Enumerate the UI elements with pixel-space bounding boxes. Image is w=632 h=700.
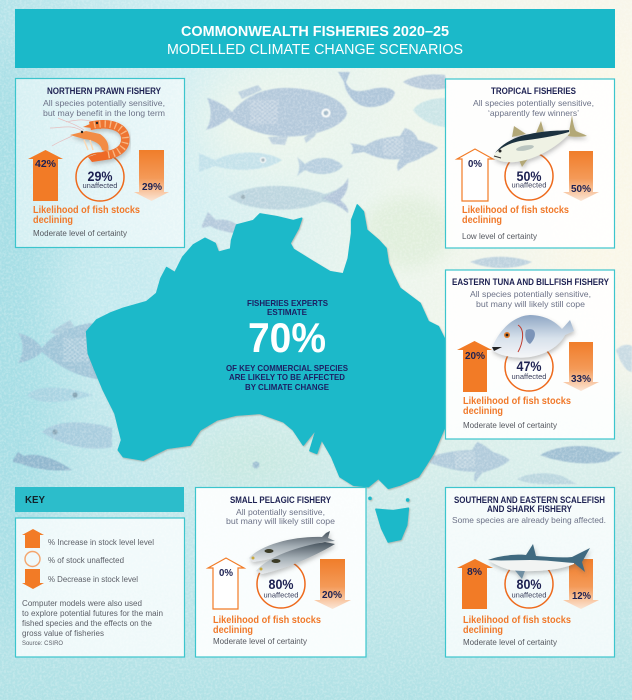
panel: Small Pelagic Fishery <box>196 488 366 657</box>
panel: Eastern Tuna and Billfish Fishery: Moderate level of certainty <box>463 421 557 430</box>
up arrow 0% <box>208 558 244 609</box>
panel: Key: % Increase in stock level level <box>48 538 154 547</box>
background fish: east coast snapper <box>430 442 510 482</box>
panel: Eastern Tuna and Billfish Fishery <box>446 270 614 439</box>
panel: Eastern Tuna and Billfish Fishery: Likelihood of fish stocks <box>463 395 571 407</box>
up arrow 0% <box>457 149 493 201</box>
panel: Northern Prawn Fishery: but may benefit in the long term <box>43 108 165 118</box>
down arrow 20% <box>314 559 351 609</box>
background fish: north east strip <box>470 257 532 268</box>
panel: Southern and Eastern Scalefish and Shark Fishery: 12% <box>572 591 591 602</box>
panel: Northern Prawn Fishery: unaffected <box>82 181 118 190</box>
panel: Eastern Tuna and Billfish Fishery: 20% <box>465 351 485 362</box>
background fish: west coast <box>18 320 105 380</box>
unaffected circle <box>505 560 553 608</box>
panel: Small Pelagic Fishery: declining <box>213 624 253 636</box>
icon: prawn <box>50 118 125 162</box>
panel: Southern and Eastern Scalefish and Shark Fishery: AND SHARK FISHERY <box>487 504 572 514</box>
icon: decrease arrow <box>22 569 44 589</box>
map text: experts estimate: FISHERIES EXPERTS <box>247 298 328 308</box>
panel: Eastern Tuna and Billfish Fishery: 33% <box>571 374 591 385</box>
panel: Small Pelagic Fishery: unaffected <box>264 590 298 600</box>
background fish: large bream <box>206 85 347 145</box>
panel: Key: % Decrease in stock level <box>48 575 138 584</box>
panel: Southern and Eastern Scalefish and Shark Fishery: SOUTHERN AND EASTERN SCALEFISH <box>454 495 605 505</box>
panel: Key heading <box>15 487 184 512</box>
panel: Tropical Fisheries: All species potentially sensitive, <box>473 98 594 108</box>
title line 1: COMMONWEALTH FISHERIES 2020–25 <box>181 24 449 40</box>
panel: Key: % of stock unaffected <box>48 556 124 565</box>
panel: Small Pelagic Fishery: Moderate level of certainty <box>213 637 307 646</box>
panel: Key: to explore potential futures for the main <box>22 609 163 618</box>
background fish: pale west <box>27 387 93 402</box>
background fish: scattered <box>517 473 577 484</box>
panel: Eastern Tuna and Billfish Fishery: All species potentially sensitive, <box>470 289 591 299</box>
background fish: snapper <box>350 128 438 171</box>
panel: Small Pelagic Fishery: but many will likely still cope <box>226 516 335 526</box>
icon: sardines <box>249 531 335 574</box>
panel: Southern and Eastern Scalefish and Shark Fishery: Likelihood of fish stocks <box>463 614 571 626</box>
panel: Key: Source: CSIRO <box>22 640 63 647</box>
panel: Northern Prawn Fishery: declining <box>33 214 73 226</box>
panel: Tropical Fisheries: Low level of certainty <box>462 232 537 241</box>
icon: unaffected circle <box>25 552 40 566</box>
panel: Northern Prawn Fishery: All species potentially sensitive, <box>43 98 165 108</box>
down arrow 12% <box>563 559 599 609</box>
panel: Tropical Fisheries <box>446 79 614 248</box>
panel: Small Pelagic Fishery: Likelihood of fish stocks <box>213 614 321 626</box>
panel: Tropical Fisheries: Likelihood of fish stocks <box>462 204 569 216</box>
background fish: tailed <box>228 178 348 213</box>
panel: Southern and Eastern Scalefish and Shark Fishery: 80% <box>516 577 542 592</box>
panel: Southern and Eastern Scalefish and Shark Fishery: Some species are already being affected. <box>452 515 606 525</box>
background fish: right edge <box>616 345 632 372</box>
panel: Key: Computer models were also used <box>22 599 142 608</box>
background fish: small upper right <box>403 74 448 90</box>
panel: Northern Prawn Fishery: NORTHERN PRAWN FISHERY <box>47 86 161 96</box>
up arrow 20% <box>457 341 492 392</box>
panel: Northern Prawn Fishery: Likelihood of fish stocks <box>33 204 140 216</box>
icon: bream fish <box>492 315 574 358</box>
panel: Eastern Tuna and Billfish Fishery: but many will likely still cope <box>476 299 585 309</box>
panel: Key heading: KEY <box>25 495 45 506</box>
panel: Tropical Fisheries: declining <box>462 214 502 226</box>
map text: commercial species <box>226 363 348 392</box>
panel: Key <box>16 518 184 657</box>
map text: experts estimate: ESTIMATE <box>267 307 307 317</box>
big number: 70%: 70% <box>248 314 326 361</box>
icon: tuna <box>493 115 587 167</box>
unaffected circle <box>257 560 305 608</box>
icon: increase arrow <box>22 529 44 548</box>
background fish: pale long <box>199 152 282 172</box>
panel: Key: gross value of fisheries <box>22 629 104 638</box>
down arrow 29% <box>134 150 169 201</box>
map text: commercial species: ARE LIKELY TO BE AFFECTED <box>229 372 345 382</box>
panel: Southern and Eastern Scalefish and Shark Fishery: declining <box>463 624 503 636</box>
title line 2: MODELLED CLIMATE CHANGE SCENARIOS <box>167 42 463 58</box>
panel: Tropical Fisheries: 50% <box>516 169 542 184</box>
map of Australia with statistic <box>87 205 445 542</box>
panel: Eastern Tuna and Billfish Fishery: EASTERN TUNA AND BILLFISH FISHERY <box>452 277 609 287</box>
panel: Southern and Eastern Scalefish and Shark Fishery <box>446 488 614 657</box>
panel: Tropical Fisheries: 50% <box>571 184 591 195</box>
map text: commercial species: OF KEY COMMERCIAL SPECIES <box>226 363 348 373</box>
background fish: pale teal <box>413 98 446 127</box>
panel: Northern Prawn Fishery: 29% <box>142 182 162 193</box>
background fish: small centre <box>297 157 343 176</box>
background fish: south-west <box>42 422 112 449</box>
panel: Southern and Eastern Scalefish and Shark Fishery: Moderate level of certainty <box>463 638 557 647</box>
background fish: curved <box>338 72 395 107</box>
background fish illustrations <box>13 72 632 484</box>
down arrow 50% <box>563 151 599 201</box>
panel: Tropical Fisheries: unaffected <box>512 180 546 190</box>
panel: Southern and Eastern Scalefish and Shark Fishery: unaffected <box>512 590 546 600</box>
unaffected circle <box>505 343 553 391</box>
background fish: lower left of north <box>202 212 242 234</box>
background fish: small dark <box>13 452 72 471</box>
down arrow 33% <box>563 342 599 391</box>
panel: Small Pelagic Fishery: 80% <box>268 577 294 592</box>
panel: Key: fished species and the effects on the <box>22 619 153 628</box>
panel: Southern and Eastern Scalefish and Shark Fishery: 8% <box>467 567 482 578</box>
panel: Eastern Tuna and Billfish Fishery: 47% <box>516 359 542 374</box>
title banner <box>15 9 615 68</box>
icon: shark <box>488 544 590 579</box>
panel: Tropical Fisheries: 0% <box>468 159 482 170</box>
panel: Eastern Tuna and Billfish Fishery: declining <box>463 405 503 417</box>
panel: Tropical Fisheries: TROPICAL FISHERIES <box>491 86 576 96</box>
background fish: far east <box>540 446 622 463</box>
unaffected circle <box>76 153 124 201</box>
panel: Tropical Fisheries: ‘apparently few winners’ <box>488 108 579 118</box>
up arrow 8% <box>457 559 493 609</box>
panel: Northern Prawn Fishery: 29% <box>88 169 112 184</box>
map text: commercial species: BY CLIMATE CHANGE <box>245 382 329 392</box>
panel: Northern Prawn Fishery: 42% <box>35 159 56 170</box>
panel: Small Pelagic Fishery: 20% <box>322 590 342 601</box>
panel: Small Pelagic Fishery: SMALL PELAGIC FISHERY <box>230 495 331 505</box>
map text: experts estimate <box>247 298 328 317</box>
panel: Eastern Tuna and Billfish Fishery: unaffected <box>512 372 546 381</box>
panel: Northern Prawn Fishery: Moderate level of certainty <box>33 229 127 238</box>
panel: Small Pelagic Fishery: All potentially sensitive, <box>236 507 325 517</box>
map landmass <box>87 205 445 542</box>
panel: Northern Prawn Fishery <box>16 78 184 248</box>
panel: Small Pelagic Fishery: 0% <box>219 568 233 579</box>
up arrow 42% <box>28 150 63 201</box>
unaffected circle <box>505 152 553 200</box>
